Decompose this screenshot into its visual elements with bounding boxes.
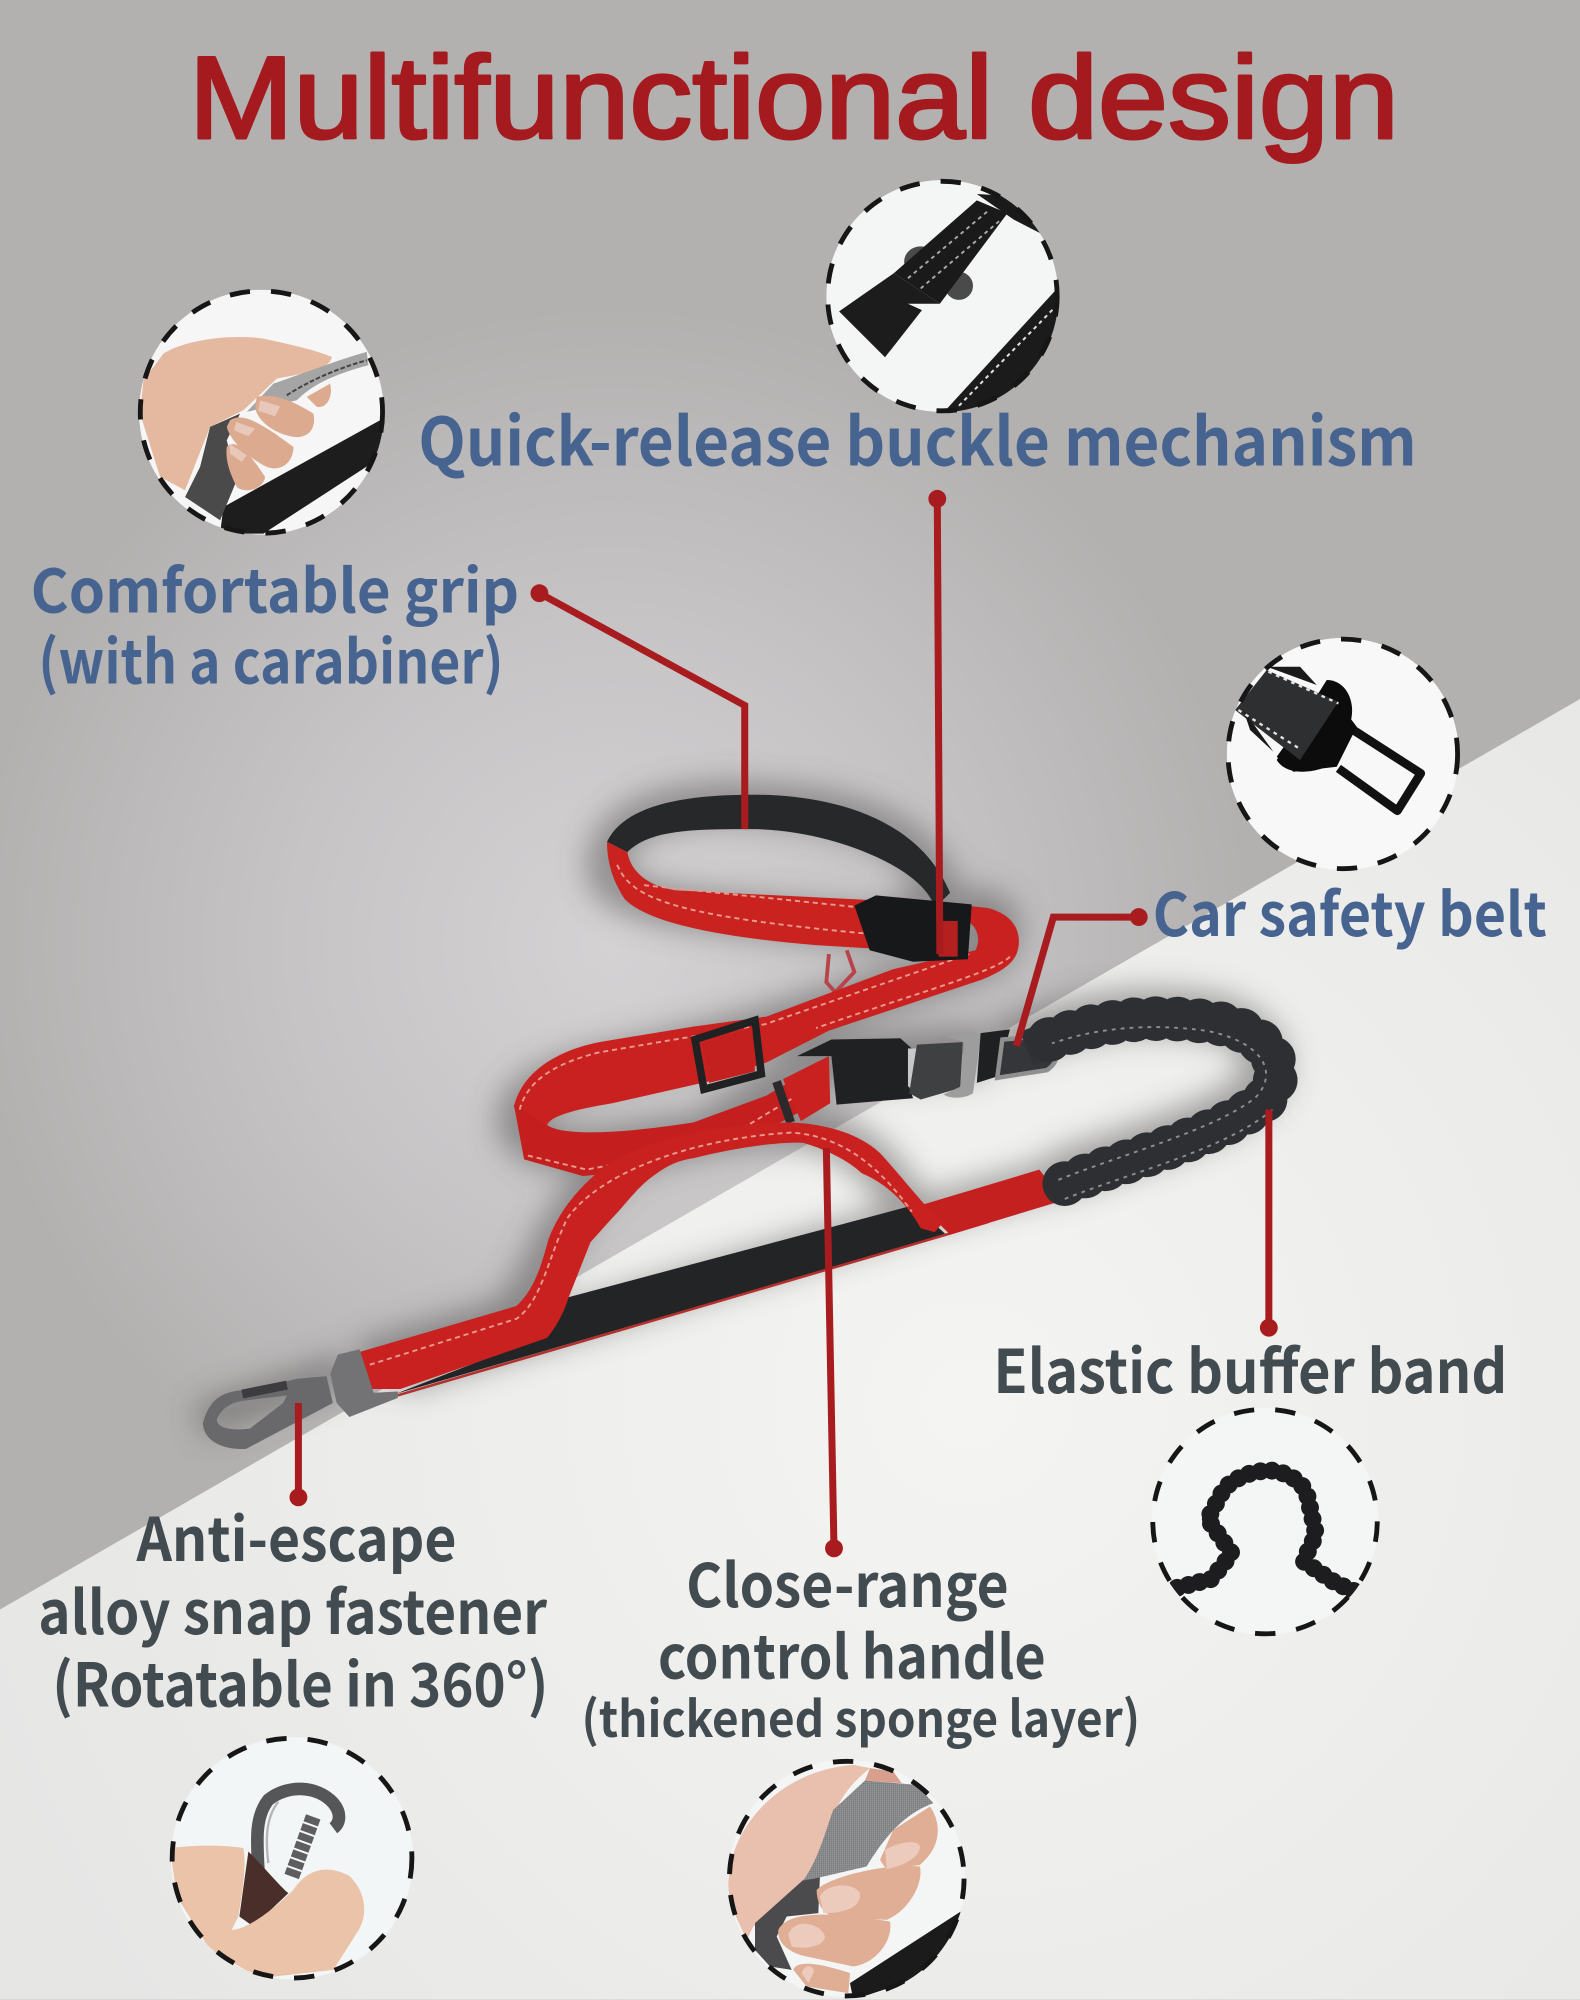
label: Quick-release buckle mechanism (418, 390, 1417, 486)
bungee arch (1202, 1484, 1358, 1596)
palm (727, 1765, 870, 1940)
black lining (850, 1910, 963, 2000)
strap dark edge (1243, 667, 1317, 752)
lower slider bar (777, 1082, 791, 1122)
strap stitching (908, 211, 1001, 288)
clip metal tongue (1338, 730, 1421, 811)
waist stitching (617, 865, 867, 934)
inset: comfortable grip (139, 290, 387, 535)
title: Multifunctional design (189, 32, 1399, 163)
brown strap (239, 1851, 288, 1926)
grey woven strap (803, 1780, 933, 1881)
bungee ruffles (1177, 1471, 1356, 1592)
grey strap (247, 352, 368, 412)
dot (825, 1539, 843, 1557)
clip tab discs (1277, 680, 1352, 772)
metal ring (944, 1032, 981, 1098)
dot (928, 490, 946, 508)
label line one: Anti-escape (136, 1492, 457, 1579)
callout: elastic buffer band (993, 1110, 1507, 1411)
car clip metal tongue (997, 1036, 1058, 1078)
band stitching (959, 306, 1056, 406)
connector (1266, 1110, 1272, 1328)
label line three: (Rotatable in 360°) (52, 1637, 548, 1724)
leash shadow (200, 802, 1266, 1421)
label: Elastic buffer band (993, 1324, 1507, 1411)
carabiner highlight (267, 1801, 278, 1863)
waist belt red section (607, 842, 880, 949)
red bottom edge (398, 1222, 988, 1395)
buckle body (839, 273, 940, 357)
strap stitching (1238, 672, 1338, 750)
connector (1016, 917, 1139, 1046)
fingernails (229, 400, 280, 462)
callout: car safety belt (1016, 867, 1547, 1046)
silver snap hook (203, 1376, 333, 1449)
fingers (778, 1806, 938, 1993)
dot (530, 584, 548, 602)
middle red strap upper (514, 906, 1019, 1125)
connector (937, 499, 940, 954)
slider buckle (695, 1020, 761, 1089)
red end section (921, 1170, 1064, 1235)
background: light diagonal lower area (0, 699, 1580, 2000)
buckle slot (908, 1048, 917, 1087)
strap through buckle (939, 921, 958, 957)
black band (220, 420, 387, 534)
inset: elastic band (1170, 1462, 1378, 1622)
strap connector (330, 1349, 398, 1417)
fingernails (788, 1842, 920, 1983)
label line two: (with a carabiner) (38, 615, 504, 702)
reflective stitching (519, 954, 1010, 1170)
inset: snap fastener (170, 1737, 413, 1979)
callout: control handle (582, 1148, 1140, 1752)
snap hook gate (242, 1385, 287, 1394)
dark strap (755, 1875, 820, 1970)
callout: quick release (418, 390, 1417, 954)
connector (539, 593, 745, 829)
connector (296, 1403, 301, 1497)
dark strap (185, 414, 240, 520)
carabiner gate (292, 1816, 313, 1876)
label: Car safety belt (1153, 867, 1547, 954)
clip strap (1235, 670, 1338, 760)
dot (1130, 908, 1148, 926)
dot (1260, 1319, 1278, 1337)
handle stitching (370, 1133, 912, 1365)
lower band (947, 291, 1057, 412)
label line three: (thickened sponge layer) (582, 1680, 1140, 1752)
label line one: Close-range (686, 1538, 1009, 1625)
middle red strap lower (514, 1059, 829, 1176)
second strap tab (945, 272, 973, 300)
inset ring: car belt (1228, 639, 1458, 869)
fingers (226, 384, 331, 490)
label line two: alloy snap fastener (38, 1565, 548, 1652)
leash product illustration (203, 795, 1276, 1449)
inset: quick release buckle (826, 180, 1065, 421)
small red carabiner (826, 950, 854, 992)
callout: comfortable grip (31, 543, 745, 829)
buckle strap (894, 200, 1007, 304)
callout: snap fastener (38, 1403, 548, 1724)
red handle arch (360, 1122, 942, 1389)
fingertip above strap (865, 1768, 902, 1783)
inset ring: grip (140, 291, 383, 533)
palm (140, 337, 332, 490)
red strap at second buckle (783, 1056, 830, 1121)
car clip black strap (977, 1029, 1010, 1083)
dot (289, 1488, 307, 1506)
inset: control handle (727, 1760, 965, 2000)
inset ring: elastic (1153, 1409, 1377, 1634)
carabiner body (257, 1789, 339, 1870)
strap end (976, 194, 1040, 233)
inset ring: handle (729, 1761, 964, 1996)
strap tabs (904, 246, 924, 264)
grey webbing (909, 1042, 963, 1099)
hand (170, 1846, 364, 1978)
slider strap (703, 1028, 755, 1083)
first black buckle (854, 895, 972, 962)
label line two: control handle (658, 1609, 1046, 1696)
inset: car safety belt clip (1227, 638, 1459, 870)
label line one: Comfortable grip (31, 543, 519, 630)
elastic bungee base (1027, 1019, 1276, 1189)
clip body (1276, 719, 1357, 772)
inset ring: buckle (828, 181, 1057, 411)
elastic bungee ruffles (1039, 1019, 1276, 1184)
strap stitching (287, 360, 367, 395)
waist belt black lining (607, 795, 950, 908)
inset ring: snap (172, 1738, 412, 1978)
elastic reflective dots (1052, 1027, 1275, 1199)
black sponge handle (395, 1205, 946, 1394)
connector (826, 1148, 834, 1548)
second black buckle (797, 1038, 913, 1105)
